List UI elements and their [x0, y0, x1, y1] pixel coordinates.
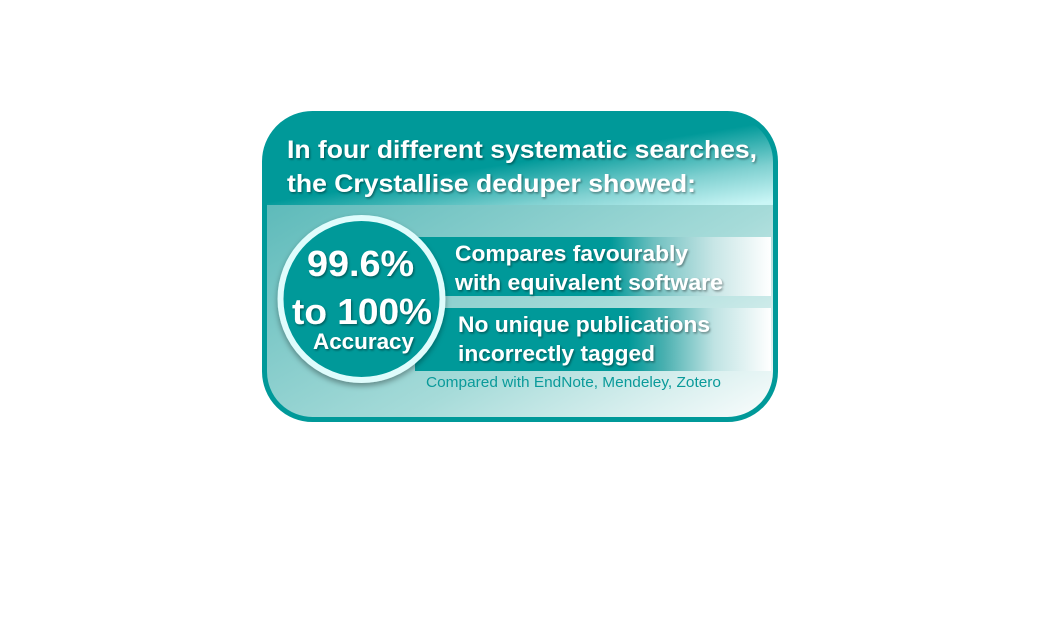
panel: header band — [262, 111, 778, 205]
text: compares favourably: with equivalent software — [454, 270, 723, 295]
heading: the Crystallise deduper showed: — [287, 170, 696, 198]
bar: compares favourably — [415, 237, 771, 296]
badge text — [292, 243, 432, 354]
text: no unique publications: incorrectly tagged — [458, 341, 655, 366]
panel: rounded card — [262, 111, 778, 420]
badge text: to 100% — [292, 291, 432, 332]
bar: no unique publications — [415, 308, 771, 371]
text: no unique publications: No unique publications — [458, 312, 710, 337]
text: compares favourably: Compares favourably — [455, 241, 689, 266]
heading: In four different systematic searches, — [287, 136, 757, 164]
infographic — [262, 111, 778, 422]
text: no unique publications — [458, 312, 710, 366]
badge text: Accuracy — [313, 329, 415, 354]
badge text: 99.6% — [307, 243, 414, 284]
text: compares favourably — [454, 241, 723, 295]
heading — [287, 136, 757, 198]
badge: accuracy circle — [280, 218, 442, 380]
caption: Compared with EndNote, Mendeley, Zotero — [426, 374, 721, 391]
